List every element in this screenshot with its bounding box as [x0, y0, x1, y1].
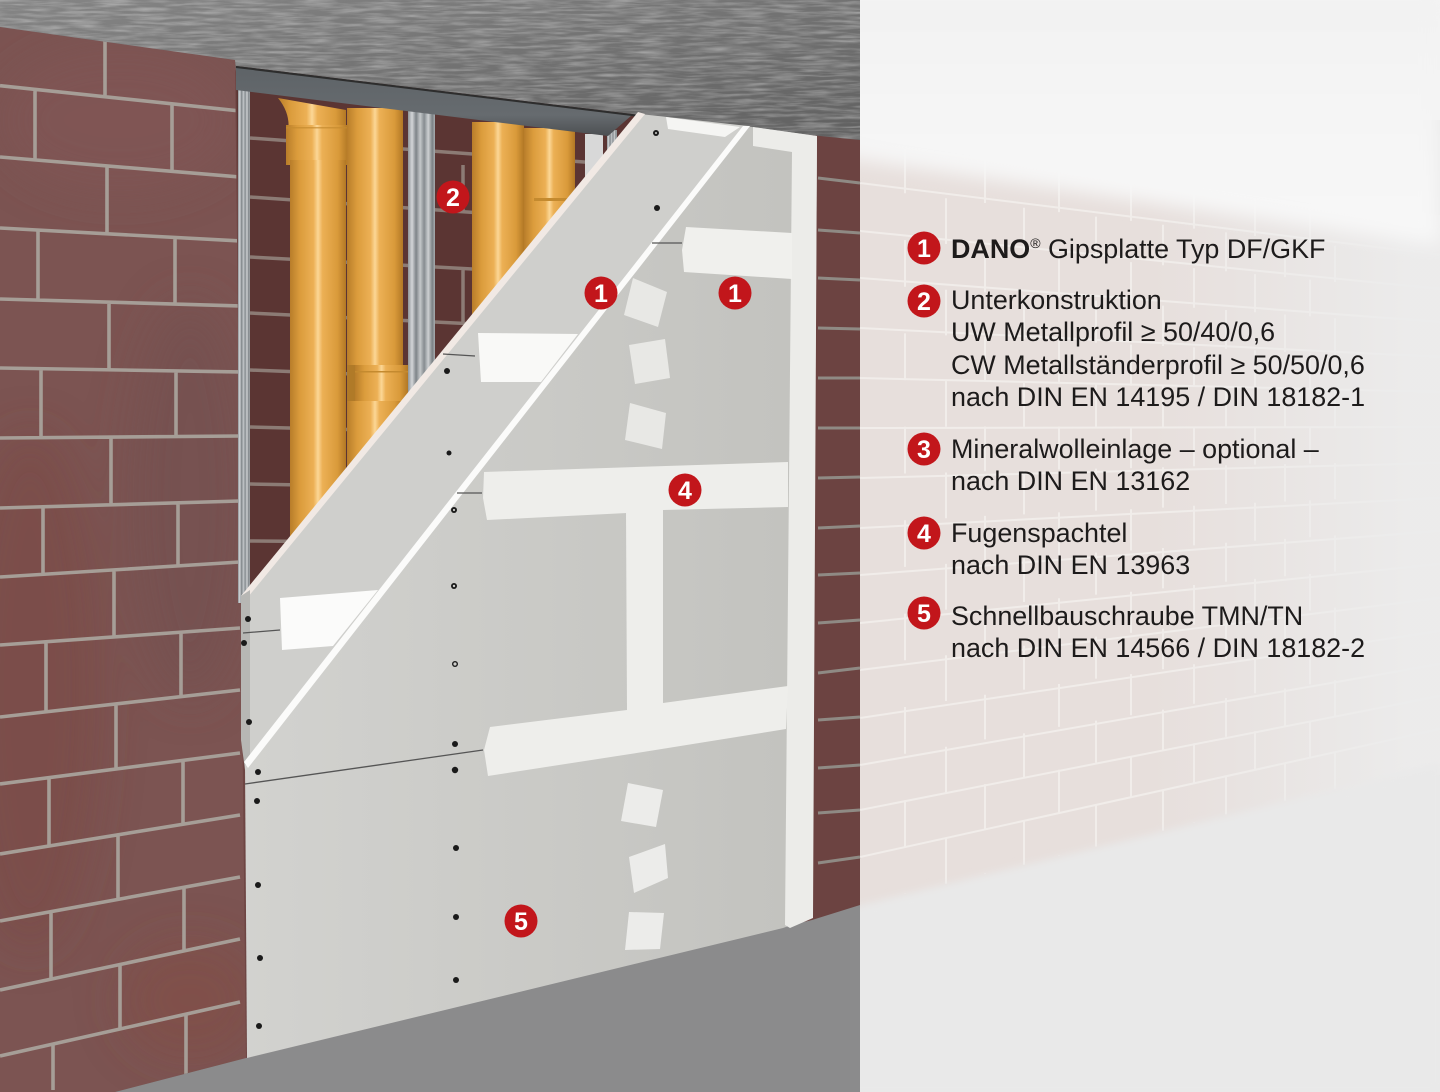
- tape: upper-left joint: [478, 333, 578, 382]
- legend item 4: Fugenspachtel: [951, 518, 1127, 548]
- UW top track: [236, 67, 632, 136]
- tape: top: [666, 117, 740, 137]
- solid upper ceiling: [860, 0, 1440, 120]
- badge: 5 near screws: [504, 904, 538, 938]
- badge: 4 on joint: [668, 474, 702, 506]
- badge: 1 on front board: [718, 276, 752, 310]
- legend item 2: nach DIN EN 14195 / DIN 18182-1: [951, 382, 1365, 412]
- brick colour mottling: [0, 504, 210, 1031]
- legend item 5: nach DIN EN 14566 / DIN 18182-2: [951, 633, 1365, 663]
- legend item 3: Mineralwolleinlage – optional –: [951, 434, 1319, 464]
- tape: lower-left joint: [280, 590, 378, 650]
- legend item 2: CW Metallständerprofil ≥ 50/50/0,6: [951, 350, 1365, 380]
- back brick wall: [236, 66, 640, 600]
- legend item 4: [908, 516, 1190, 580]
- board seams: [243, 243, 682, 784]
- right grey stud: [607, 130, 617, 160]
- vertical T band: [626, 508, 663, 712]
- legend item 3: 3: [917, 436, 931, 464]
- panel: floor: [115, 905, 860, 1092]
- white cut edge of back board: [241, 112, 645, 597]
- front board surface: [245, 126, 817, 1058]
- middle metal stud: [408, 108, 435, 398]
- left metal stud: [238, 88, 250, 603]
- scene backdrop: [0, 0, 860, 1092]
- legend item 3: nach DIN EN 13162: [951, 466, 1190, 496]
- badge: 1 on back board: 1: [594, 280, 608, 308]
- orange pipe 2: [347, 108, 408, 598]
- legend item 2: Unterkonstruktion: [951, 285, 1162, 315]
- panel: faded right background: [860, 163, 1429, 908]
- back board surface: [241, 114, 748, 765]
- panel: left brick wall: [0, 20, 260, 1092]
- orange pipe 1: [278, 98, 348, 600]
- legend item 1: 1: [917, 235, 931, 263]
- legend item 2: UW Metallprofil ≥ 50/40/0,6: [951, 317, 1275, 347]
- legend item 4: nach DIN EN 13963: [951, 550, 1190, 580]
- badge: 2 on substructure: 2: [446, 184, 460, 212]
- legend item 5: 5: [917, 600, 931, 628]
- brick mortar joints: [0, 40, 240, 1090]
- faded brick wall: [860, 163, 1242, 904]
- legend item 1: Gipsplatte Typ DF/GKF: [1041, 234, 1325, 264]
- legend: [908, 232, 1365, 663]
- white stud: [585, 134, 603, 194]
- soft floor edge: [800, 764, 1440, 1092]
- legend item 2: [908, 284, 1365, 412]
- legend item 5: [908, 596, 1365, 663]
- joint patch squares upper: [624, 278, 670, 449]
- panel: ceiling: [0, 0, 860, 140]
- orange pipe 3: [472, 122, 524, 432]
- panel: wall opening with substructure: [236, 66, 640, 603]
- joint patch squares lower: [621, 783, 668, 950]
- left board rim: [241, 590, 250, 770]
- legend item 1: DANO: [951, 234, 1030, 264]
- legend item 4: 4: [917, 520, 931, 548]
- legend item 5: Schnellbauschraube TMN/TN: [951, 601, 1303, 631]
- panel: plasterboard front layer: [243, 126, 817, 1058]
- badge: 4 on joint: 4: [678, 477, 692, 505]
- legend item 2: 2: [917, 288, 931, 316]
- badge: 1 on front board: 1: [728, 280, 742, 308]
- faded ceiling: [790, 0, 1440, 245]
- faded floor: [860, 0, 1440, 1092]
- orange pipe 4: [524, 128, 575, 348]
- panel: plasterboard back layer: [241, 112, 748, 770]
- fastening screws: [241, 130, 660, 1029]
- joint band lower: [484, 686, 788, 776]
- badge: 2 on substructure: [436, 180, 470, 214]
- panel: right brick strip: [812, 130, 860, 920]
- legend item 3: [908, 432, 1319, 496]
- legend item 1: [908, 232, 1325, 264]
- right joint compound band: [753, 127, 817, 928]
- badge: 5 near screws: 5: [514, 908, 528, 936]
- joint band upper: [682, 227, 792, 279]
- white diagonal edge: [244, 126, 750, 768]
- legend item 1: ®: [1030, 235, 1041, 251]
- joint band middle with number 4: [483, 462, 788, 520]
- badge: 1 on back board: [584, 276, 618, 310]
